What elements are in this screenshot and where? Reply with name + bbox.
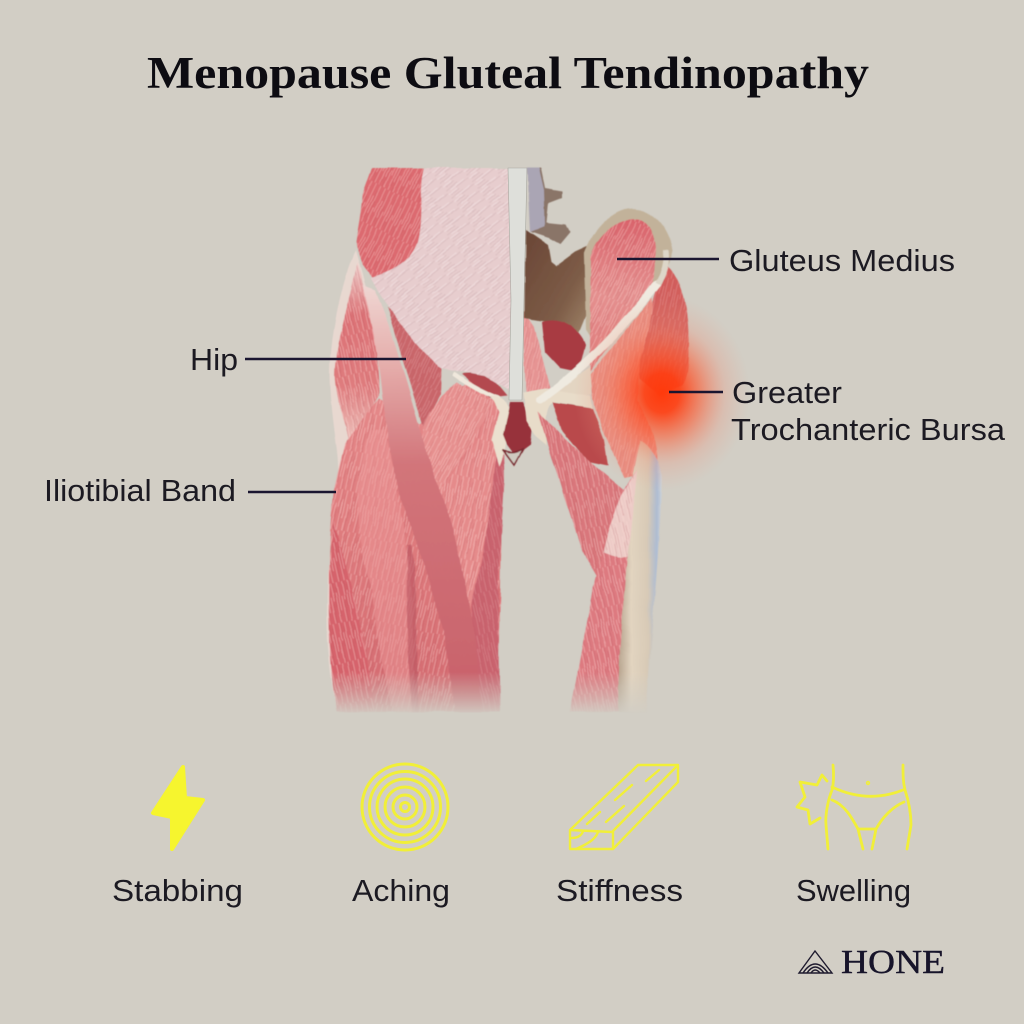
deep iliopsoas [387,307,441,427]
pectineus right [538,412,624,577]
inflamed bursa glow [574,295,750,491]
pubic connector [491,396,509,466]
symptom: aching: Aching [352,873,450,908]
dark hip muscle [553,402,608,466]
spine and pelvis bones [523,168,689,712]
label: Greater Trochanteric Bursa: Greater [732,375,842,410]
dark gap behind ligament [462,372,508,398]
label: Greater Trochanteric Bursa [669,375,1006,447]
title: Menopause Gluteal Tendinopathy [147,48,870,98]
rectus femoris highlight [358,430,415,712]
gluteal outer muscle [639,266,690,386]
gracilis [471,452,505,711]
linea alba strip [508,168,527,400]
symptom: aching [352,764,450,908]
femur [618,440,662,712]
ilium rim [583,208,673,335]
left inner quad shadow [407,545,418,712]
gluteus medius [590,219,656,372]
symptom: swelling [796,765,911,908]
inguinal ligament right [540,284,657,400]
label: Hip: Hip [190,342,238,377]
pubic bone [523,388,592,445]
icon: wooden plank [570,765,678,849]
logo: HONE [799,944,945,981]
vertebra [527,168,570,244]
aponeurosis white sheet [370,168,513,392]
outer edge band [326,251,366,687]
symptom: stiffness [556,765,683,908]
label: Gluteus Medius: Gluteus Medius [729,243,955,278]
tensor fasciae muscle [335,262,379,440]
icon: lightning bolt [153,767,203,849]
adductor longus [441,420,496,607]
vastus lateral right [570,470,637,712]
abdominal oblique red [356,168,424,278]
deep dark red muscle [542,320,586,372]
large upper thigh muscle [590,298,658,478]
hip capsule patch [560,368,592,395]
anatomy illustration [327,168,689,712]
symptom: stabbing: Stabbing [112,873,243,908]
sacrum brown [523,230,587,333]
quadriceps base [329,380,504,712]
dark pelvic floor [503,402,532,456]
symptom: stabbing [112,767,243,908]
icon: hips with pain burst [797,765,911,849]
sartorius [363,285,482,712]
vastus lateralis [329,520,375,712]
pectineus [423,382,492,492]
logo: HONE: HONE [841,944,945,981]
icon: logo triangle [799,951,832,973]
symptom: stiffness: Stiffness [556,873,683,908]
left leg muscles [327,168,550,712]
icon: concentric circles [362,764,448,850]
right adductor top [522,308,550,392]
label: Iliotibial Band: Iliotibial Band [44,473,236,508]
inguinal ligament left [453,373,500,399]
label: Greater Trochanteric Bursa: Trochanteric Bursa [731,412,1006,447]
symptom: swelling: Swelling [796,873,911,908]
